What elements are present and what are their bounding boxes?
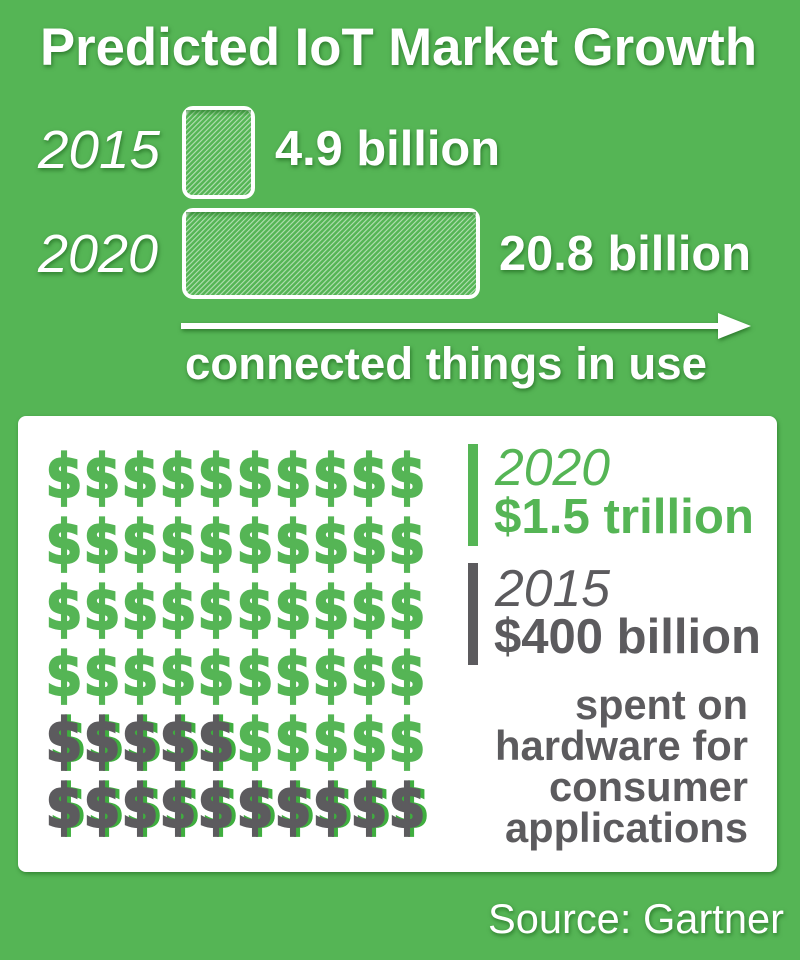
green dollars rows 1-4: $$$$$$$$$$ (46, 641, 425, 710)
row 6: gray dollars: $$$$$$$$$$ (50, 773, 429, 842)
green dollars rows 1-4 (46, 443, 425, 710)
caption: applications (505, 804, 748, 851)
legend: 2020 (468, 438, 754, 546)
legend: 2015: $400 billion (494, 610, 761, 664)
axis caption: connected things in use (185, 338, 707, 389)
row 5: mixed dollars: $$$$$ (50, 707, 238, 776)
caption: consumer (549, 763, 748, 810)
legend: 2015: 2015 (494, 559, 610, 617)
caption: spent on (575, 681, 748, 728)
row 5: mixed dollars: $$$$$ (237, 707, 425, 776)
bar: 2015 (184, 108, 253, 197)
bar chart: connected things in use (37, 108, 751, 389)
dollar pictogram (46, 443, 429, 842)
label: 2020: 2020 (37, 224, 158, 284)
row 5: mixed dollars: $$$$$ (46, 707, 234, 776)
green dollars rows 1-4: $$$$$$$$$$ (46, 575, 425, 644)
legend: 2015 (468, 559, 761, 665)
source: Source: Gartner (488, 895, 784, 942)
green dollars rows 1-4: $$$$$$$$$$ (46, 443, 425, 512)
legend: 2020: $1.5 trillion (494, 490, 754, 544)
row 5: mixed dollars (46, 707, 425, 776)
value: 4.9 billion: 4.9 billion (275, 122, 500, 176)
caption (495, 681, 748, 851)
legend: 2020: 2020 (494, 438, 610, 496)
caption: hardware for (495, 722, 748, 769)
panel: spending (18, 416, 777, 872)
green dollars rows 1-4: $$$$$$$$$$ (46, 509, 425, 578)
label: 2015: 2015 (37, 120, 161, 180)
arrow (181, 313, 751, 339)
bar: 2020 (184, 210, 478, 297)
row 6: gray dollars: $$$$$$$$$$ (46, 773, 425, 842)
value: 20.8 billion: 20.8 billion (499, 227, 751, 281)
title: Predicted IoT Market Growth (40, 18, 757, 77)
